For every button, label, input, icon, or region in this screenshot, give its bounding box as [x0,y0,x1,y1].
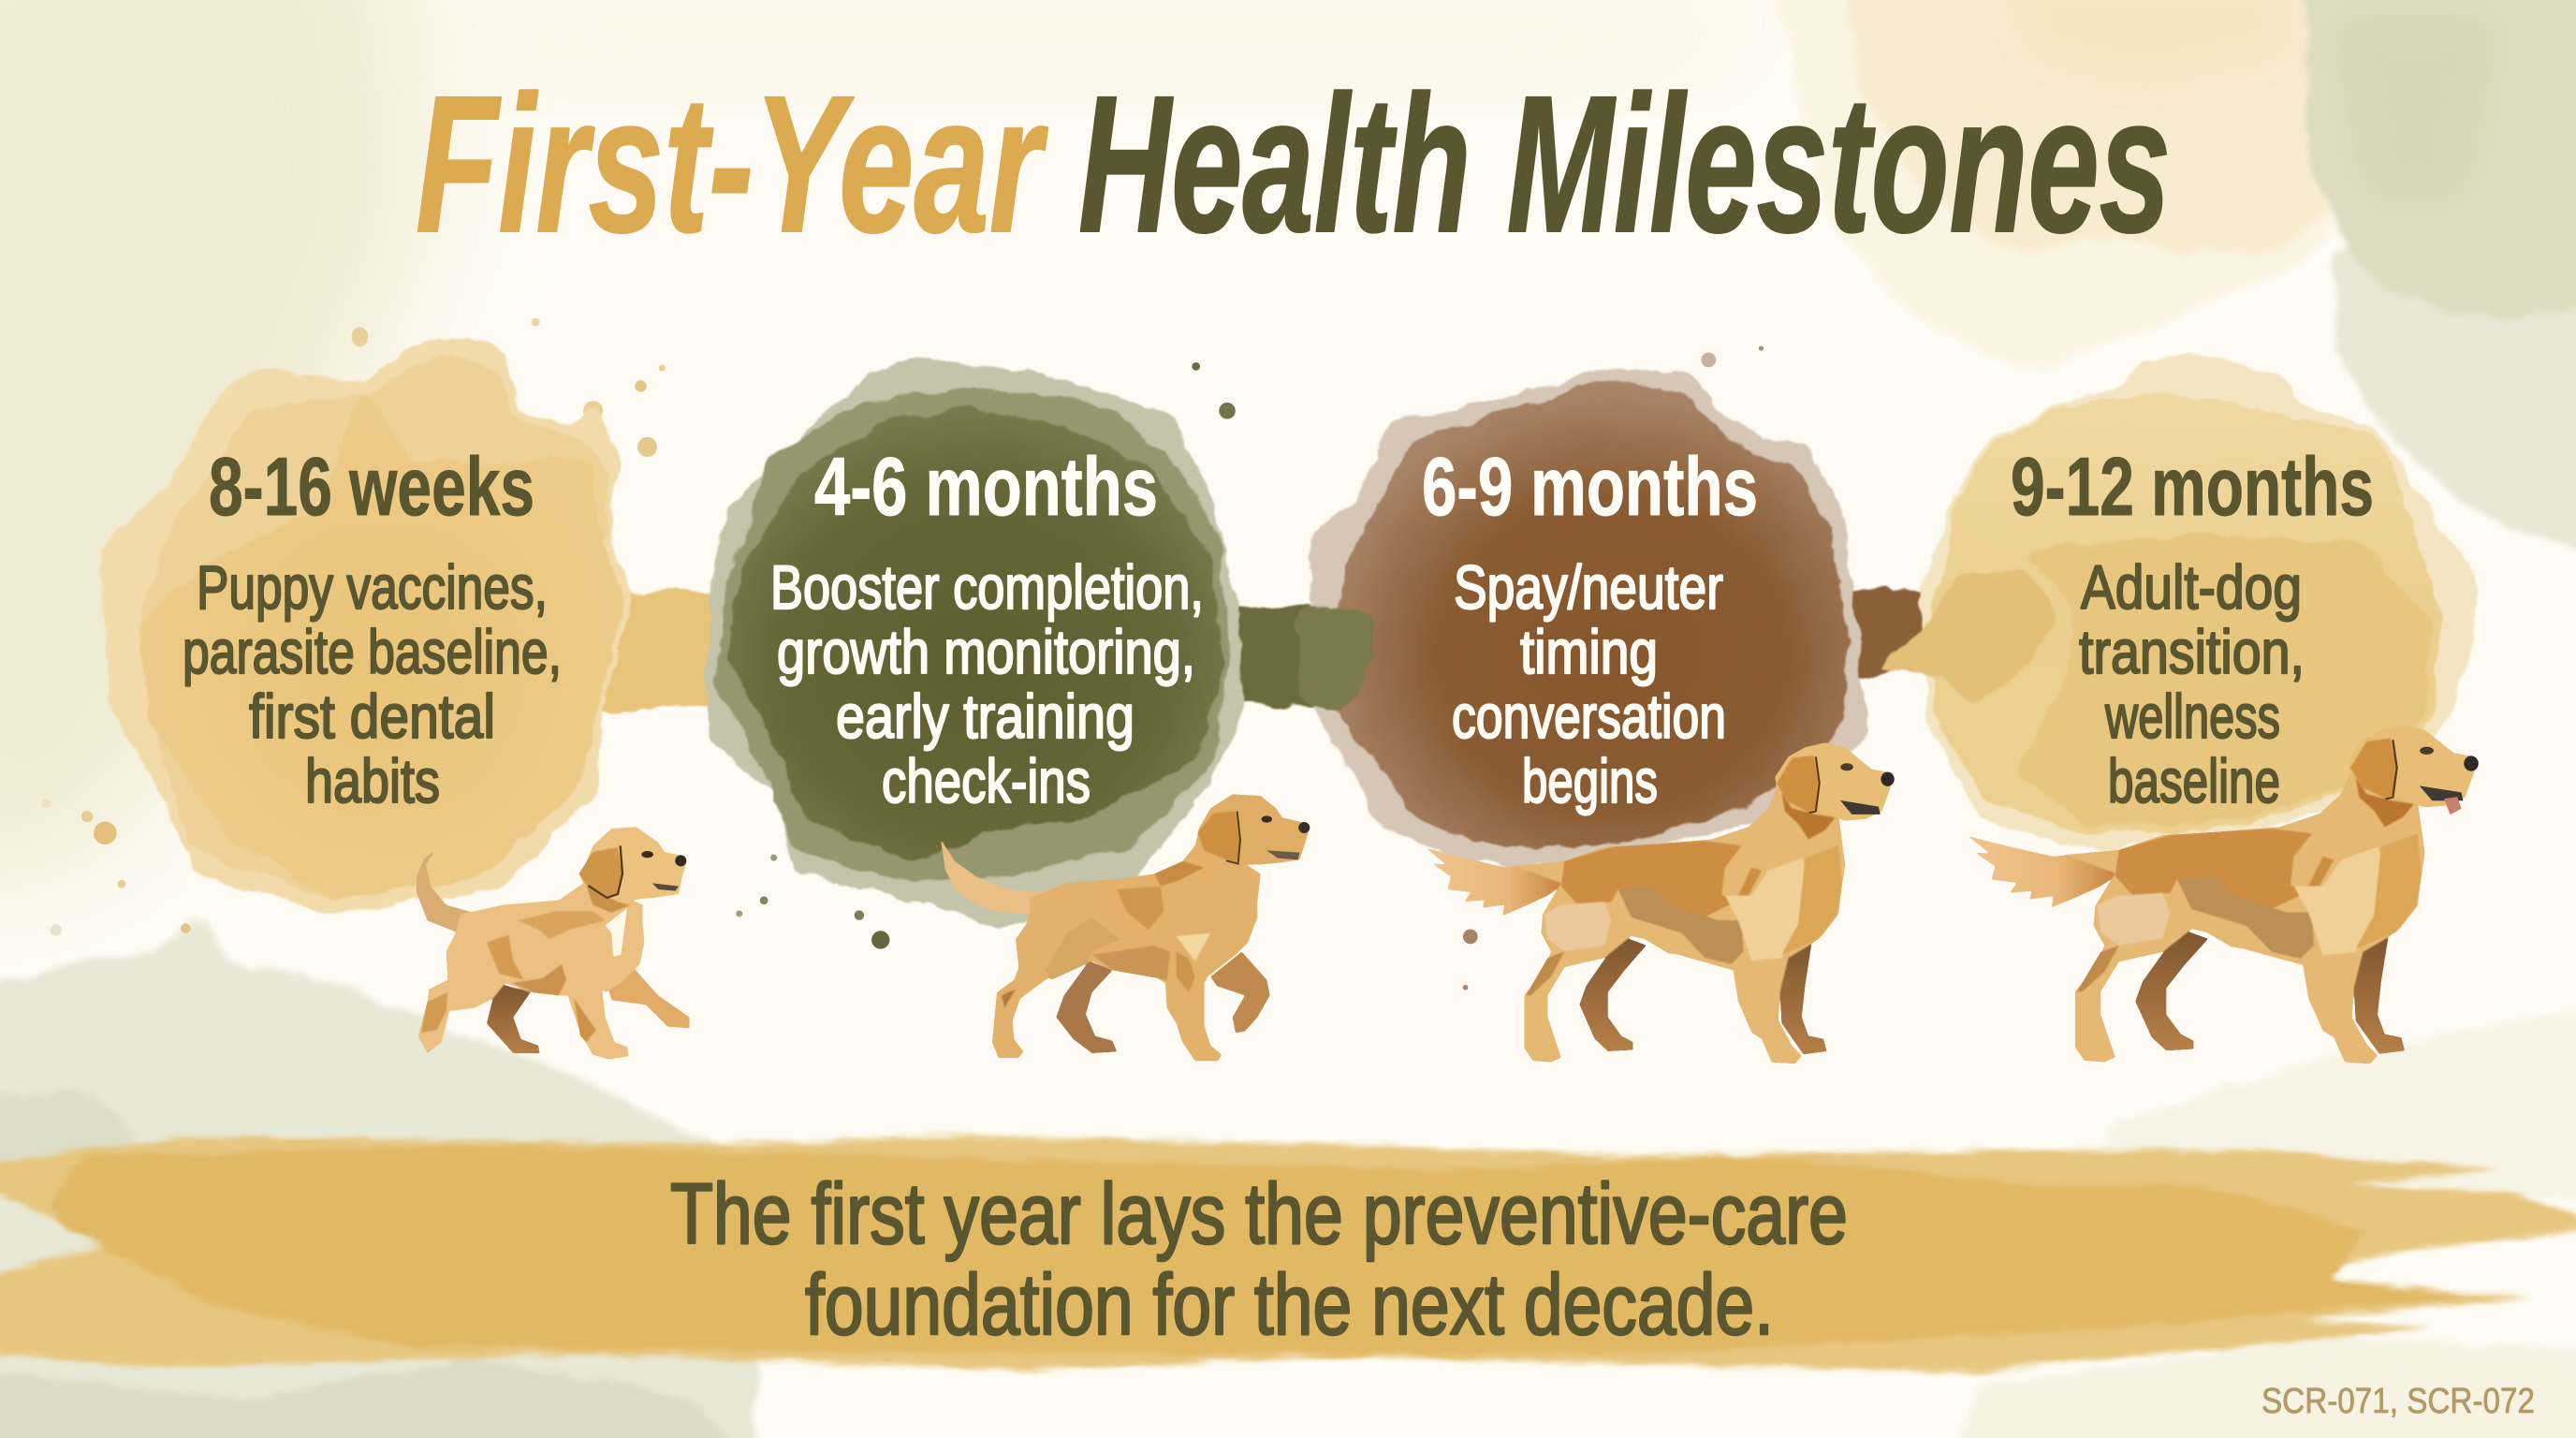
panel: 8-16 weeks [100,337,636,916]
tongue [2444,797,2462,814]
description: 6-9 months: conversation [1452,682,1726,751]
icon: puppy, 8-16 weeks [417,827,690,1060]
heading: 4-6 months: 4-6 months [814,440,1158,533]
description: 8-16 weeks: first dental [249,682,495,751]
banner text: The first year lays the preventive-care [670,1167,1848,1262]
description: 6-9 months: timing [1520,617,1658,686]
connector: 4-6 months to 6-9 months [1208,605,1355,707]
panel: 4-6 months [710,357,1245,925]
description: 8-16 weeks: parasite baseline, [183,617,562,686]
description: 8-16 weeks [183,552,562,815]
blob: sand wash [1873,348,2478,848]
description: 8-16 weeks: Puppy vaccines, [197,552,548,622]
icon: adolescent dog, 6-9 months [1426,742,1895,1064]
description: 4-6 months: early training [836,682,1134,751]
heading: 9-12 months: 9-12 months [2011,440,2374,533]
title [416,56,2171,273]
connector: 6-9 months to 9-12 months [1815,588,1955,681]
description: 9-12 months: transition, [2079,617,2305,686]
splatter dots [41,318,1764,990]
description: 9-12 months: baseline [2108,746,2280,815]
icon: adult dog, 9-12 months [1968,725,2479,1064]
blob: olive wash [710,357,1245,925]
description: 4-6 months: Booster completion, [770,552,1204,622]
icon: young dog, 4-6 months [941,794,1310,1061]
heading: 6-9 months: 6-9 months [1422,440,1758,533]
description: 6-9 months: Spay/neuter [1454,552,1723,622]
description: 6-9 months [1452,552,1726,815]
banner text: foundation for the next decade. [805,1257,1774,1353]
blob: gold wash [100,337,636,916]
connector: 8-16 weeks to 4-6 months [592,592,731,712]
banner text [670,1167,1848,1353]
panel: 9-12 months [1873,348,2478,848]
description: 4-6 months [770,552,1204,815]
bottom banner: brush stroke [0,1136,2576,1372]
title part: First-Year: First-Year [416,56,1048,273]
description: 6-9 months: begins [1522,746,1658,815]
connector end: olive lobe over brown [1298,605,1377,710]
description: 8-16 weeks: habits [305,746,440,815]
blob: brown wash [1311,370,1868,871]
description: 9-12 months: wellness [2104,682,2280,751]
panel: 6-9 months [1298,370,1868,871]
description: 9-12 months [2079,552,2305,815]
heading: 8-16 weeks: 8-16 weeks [209,440,534,533]
description: 4-6 months: growth monitoring, [777,617,1195,686]
description: 4-6 months: check-ins [882,746,1090,815]
source reference: SCR-071, SCR-072 [2261,1382,2535,1421]
description: 9-12 months: Adult-dog [2081,552,2302,622]
